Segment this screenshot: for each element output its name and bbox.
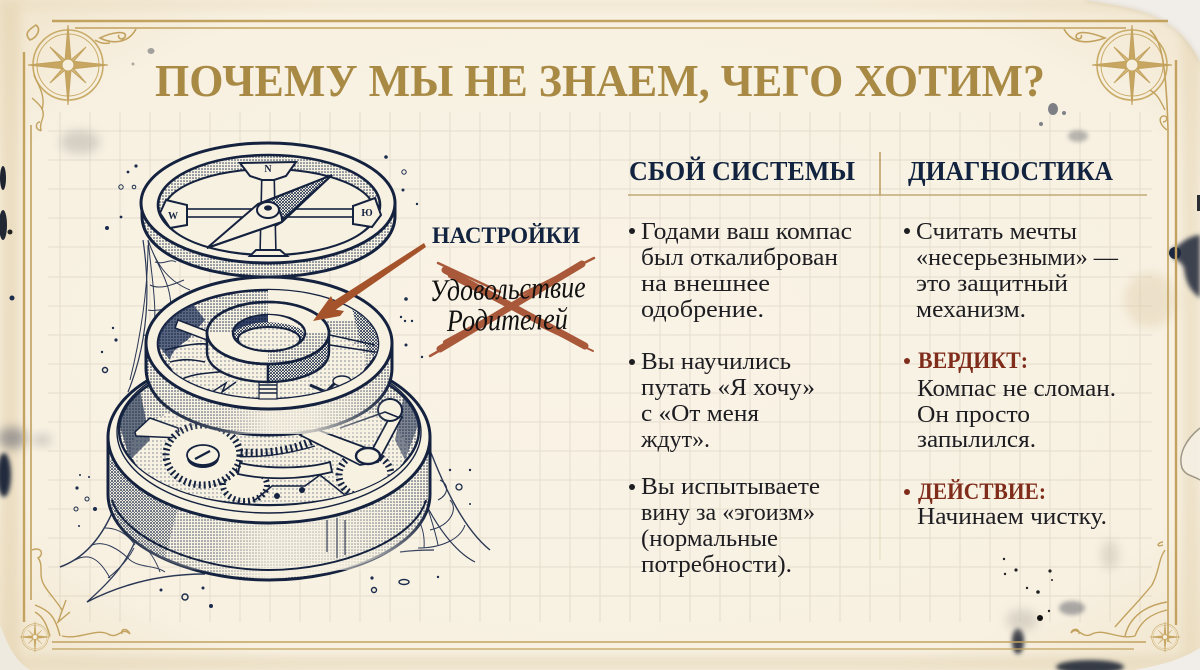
bullet 2: с «От меня (641, 401, 759, 427)
bullet 3: (нормальные (641, 526, 778, 552)
grid lines (48, 112, 1152, 622)
bullet: verdict (904, 348, 1116, 453)
middle ring (146, 277, 392, 435)
bullet: point: механизм. (916, 297, 1026, 323)
bullet: action: ДЕЙСТВИЕ: (918, 479, 1046, 504)
bullet 3 (629, 474, 820, 578)
flourish: top left (27, 25, 136, 43)
small gears (223, 469, 267, 501)
left bracket (135, 418, 180, 438)
settings disc (207, 300, 329, 382)
compass cross: N (264, 164, 272, 175)
bullet: verdict: запылился. (917, 427, 1036, 453)
compass cross: Ю (361, 208, 373, 219)
corner compass rose: bottom left (20, 622, 50, 652)
south tab (250, 250, 287, 256)
east tab (353, 198, 381, 227)
crossed-out note (429, 258, 594, 356)
screw (259, 380, 277, 399)
corner compass rose: bottom right (1150, 622, 1180, 652)
cobwebs (60, 240, 490, 602)
flourish: bottom left (32, 549, 130, 637)
north tab (240, 162, 296, 180)
panel: diagnostics (904, 156, 1119, 530)
lever arm (300, 413, 402, 465)
bottom case (106, 380, 432, 582)
flourish: bottom right (1071, 542, 1167, 637)
bullet: verdict: ВЕРДИКТ: (918, 348, 1028, 373)
compass needle (207, 175, 332, 248)
heading: СБОЙ СИСТЕМЫ (629, 156, 855, 186)
illustration: dusty compass taken apart (10, 143, 490, 608)
bullet: point: это защитный (916, 271, 1068, 297)
bullet: action: Начинаем чистку. (917, 504, 1107, 530)
bullet: point (904, 219, 1119, 323)
bullet 1: одобрение. (641, 297, 764, 323)
flourish: right (1150, 90, 1167, 130)
corner compass rose: top left (28, 25, 108, 105)
bullet 1 (629, 219, 852, 323)
bullet 1: на внешнее (641, 271, 770, 297)
bullet 2 (629, 349, 815, 453)
dust specks (10, 155, 471, 608)
bullet 3: Вы испытываете (641, 474, 820, 500)
title: ПОЧЕМУ МЫ НЕ ЗНАЕМ, ЧЕГО ХОТИМ? (155, 55, 1045, 106)
bullet: action (904, 479, 1107, 530)
bullet 2: ждут». (640, 427, 710, 453)
compass cross (160, 162, 381, 256)
compass cross: W (168, 211, 178, 222)
large gear with screw (166, 425, 240, 485)
bullet: verdict: Он просто (917, 402, 1030, 428)
flourish: top right (1064, 29, 1168, 130)
bullet: verdict: Компас не сломан. (917, 376, 1116, 402)
arrow (313, 243, 426, 321)
top ring with compass face (141, 143, 395, 277)
bullet 2: Вы научились (641, 349, 791, 375)
bullet: point: Считать мечты (916, 219, 1077, 245)
bullet 3: потребности). (641, 552, 792, 578)
bullet 1: Годами ваш компас (641, 219, 852, 245)
handwritten crossed-out words: Удовольствие (429, 269, 586, 308)
bullet 1: был откалиброван (641, 245, 838, 271)
corner compass rose: top right (1092, 25, 1172, 105)
panel: system failure (629, 156, 855, 578)
plate (238, 462, 332, 478)
flourish: left (32, 75, 43, 131)
heading: ДИАГНОСТИКА (908, 156, 1113, 186)
column dividers (628, 152, 1147, 560)
arc gear (180, 432, 318, 453)
bullet: point: «несерьезными» — (916, 245, 1119, 271)
label: settings: НАСТРОЙКИ (432, 223, 580, 248)
red cross (430, 258, 594, 356)
bullet 3: вину за «эгоизм» (641, 500, 815, 526)
crossed-out note: Родителей (446, 301, 569, 338)
west tab (160, 200, 187, 228)
bullet 2: путать «Я хочу» (641, 375, 815, 401)
